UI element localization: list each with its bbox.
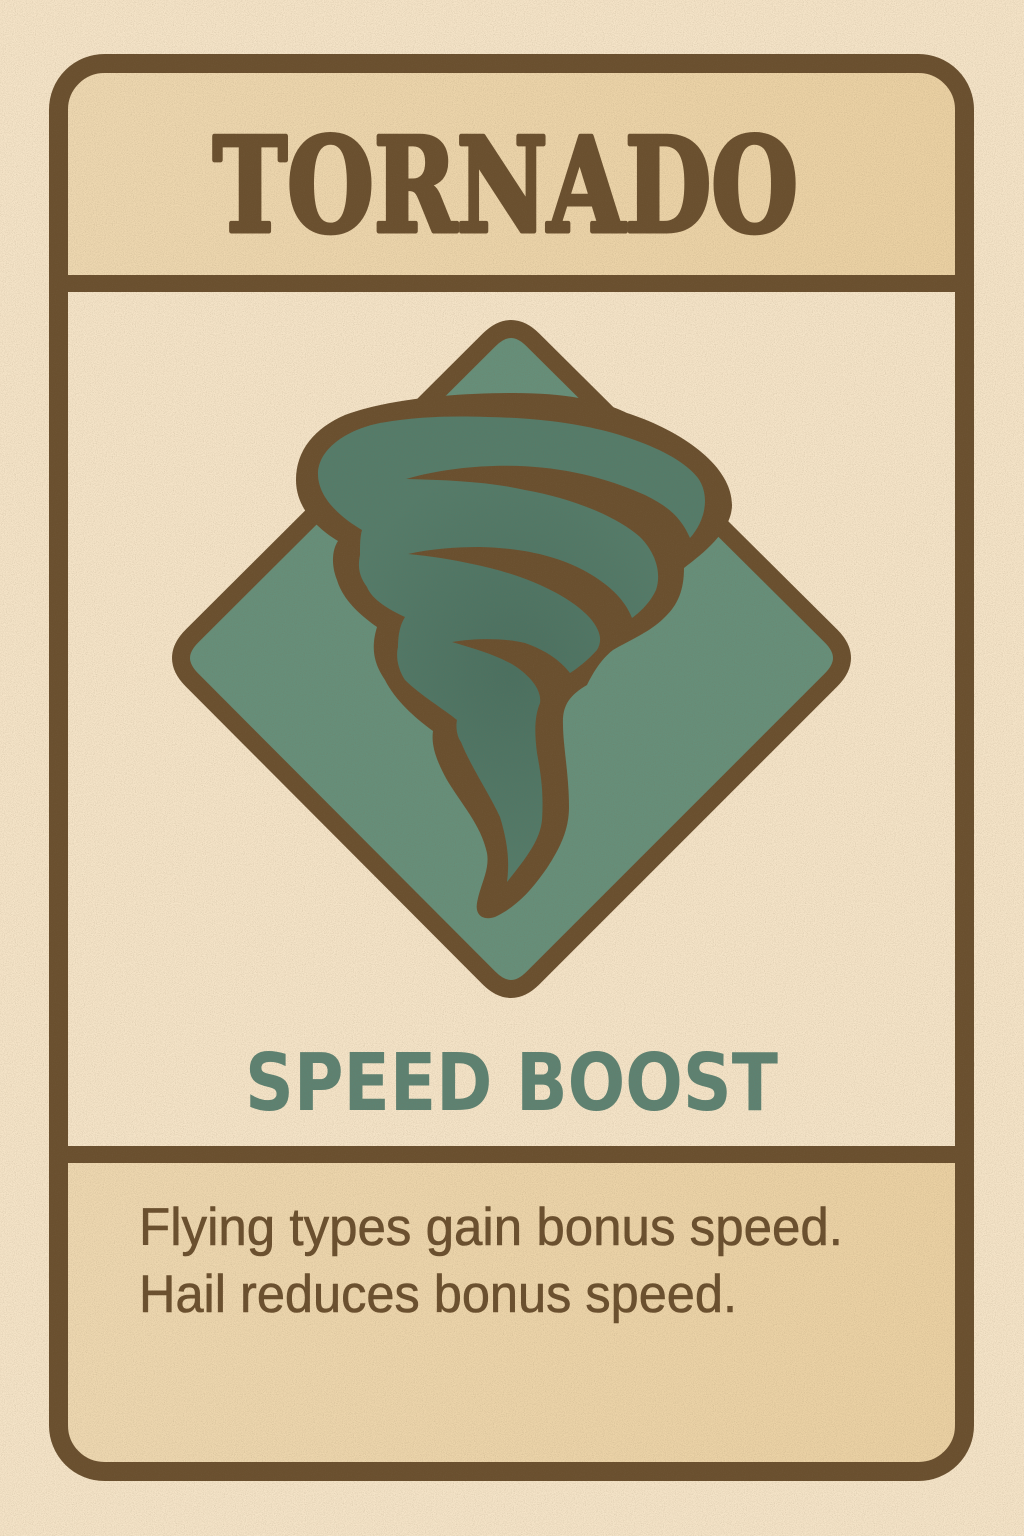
tornado silhouette xyxy=(296,393,732,918)
title: TORNADO xyxy=(213,109,798,262)
description line 2: Hail reduces bonus speed. xyxy=(139,1265,737,1324)
subtitle: speed boost: SPEED BOOST xyxy=(245,1037,778,1129)
icon: tornado in diamond xyxy=(181,329,842,989)
tornado inner funnel xyxy=(318,417,705,882)
diamond badge xyxy=(181,329,842,989)
footer band xyxy=(58,1155,964,1471)
header band xyxy=(68,73,955,275)
footer divider xyxy=(58,1146,964,1163)
description text xyxy=(139,1198,843,1324)
description line 1: Flying types gain bonus speed. xyxy=(139,1198,843,1257)
header divider xyxy=(58,275,964,292)
